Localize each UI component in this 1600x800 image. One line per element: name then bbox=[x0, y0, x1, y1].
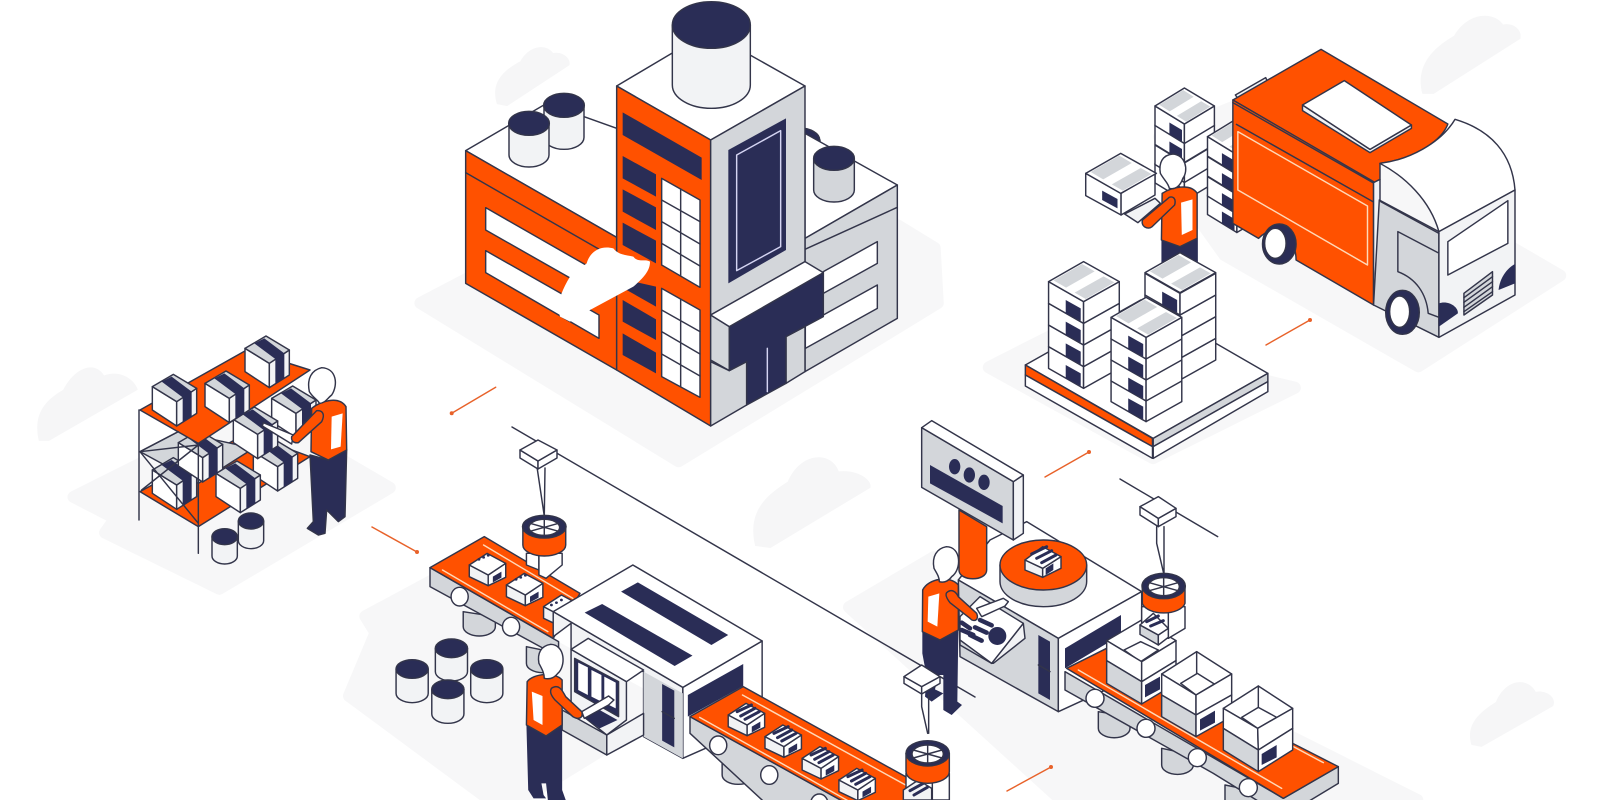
truck cabin bbox=[1374, 119, 1515, 337]
shelf posts and braces bbox=[139, 410, 198, 553]
cable line bbox=[512, 427, 975, 697]
middle shelf bbox=[140, 432, 253, 483]
pallet stack left bbox=[1049, 262, 1119, 388]
middle shelf boxes bbox=[178, 386, 316, 482]
production line 1 bbox=[396, 468, 966, 800]
display board bbox=[922, 421, 1023, 540]
white hand mark bbox=[559, 247, 650, 322]
entrance canopy bbox=[711, 262, 823, 426]
lower shelf boxes bbox=[152, 439, 298, 513]
truck front wheel bbox=[1386, 290, 1419, 334]
hanging cube front bbox=[904, 665, 940, 733]
box under second head bbox=[1140, 613, 1168, 645]
truck cargo body bbox=[1233, 49, 1448, 305]
operator console bbox=[562, 638, 644, 755]
second conveyor belt bbox=[690, 687, 966, 800]
main machine bbox=[553, 565, 762, 758]
pallet stack front bbox=[1111, 297, 1182, 422]
connector arrows bbox=[372, 318, 1312, 791]
orange post bbox=[959, 510, 987, 579]
roof of left wing bbox=[466, 103, 617, 237]
small boxes bbox=[469, 553, 580, 627]
control panel bbox=[960, 597, 1025, 663]
small rooftop tanks bbox=[509, 93, 584, 167]
turntable bbox=[1000, 540, 1087, 607]
held box bbox=[1086, 153, 1160, 223]
bottom shelf bbox=[140, 433, 310, 527]
top shelf boxes bbox=[152, 336, 289, 426]
pallet bbox=[1025, 300, 1268, 458]
long cable rear bbox=[1120, 479, 1218, 537]
truck and pallet scene bbox=[1025, 49, 1515, 458]
building: factory bbox=[466, 2, 897, 426]
third worker bbox=[922, 547, 1008, 715]
top shelf bbox=[140, 350, 310, 443]
small boxes on belt bbox=[728, 703, 875, 800]
pallet stack back bbox=[1145, 253, 1216, 380]
second belt lower bbox=[1065, 648, 1338, 800]
box on turntable bbox=[1025, 547, 1061, 577]
first conveyor belt bbox=[430, 537, 580, 657]
box stack beside truck bbox=[1207, 119, 1267, 232]
production line 2 bbox=[903, 421, 1338, 800]
second stamping head rear bbox=[1142, 527, 1185, 638]
left wing facade bbox=[466, 151, 617, 370]
shelf worker bbox=[262, 368, 347, 535]
first stamping head bbox=[522, 468, 566, 578]
operator worker bbox=[526, 644, 614, 800]
first hanging cube bbox=[520, 440, 557, 469]
hanging cube rear bbox=[1140, 497, 1176, 527]
tower bbox=[617, 53, 805, 426]
machine body bbox=[958, 522, 1142, 712]
truck rear wheel bbox=[1262, 224, 1296, 264]
tall box stack behind worker bbox=[1155, 88, 1214, 201]
conveyor legs bbox=[463, 612, 559, 673]
right wing bbox=[779, 128, 897, 372]
drums bbox=[212, 513, 264, 564]
shelf scene bbox=[139, 336, 347, 564]
third stamping head bbox=[903, 741, 949, 800]
big chimney tank bbox=[672, 2, 750, 108]
open boxes bbox=[1107, 620, 1293, 772]
drum group bbox=[396, 639, 503, 723]
loading worker bbox=[1142, 154, 1198, 263]
